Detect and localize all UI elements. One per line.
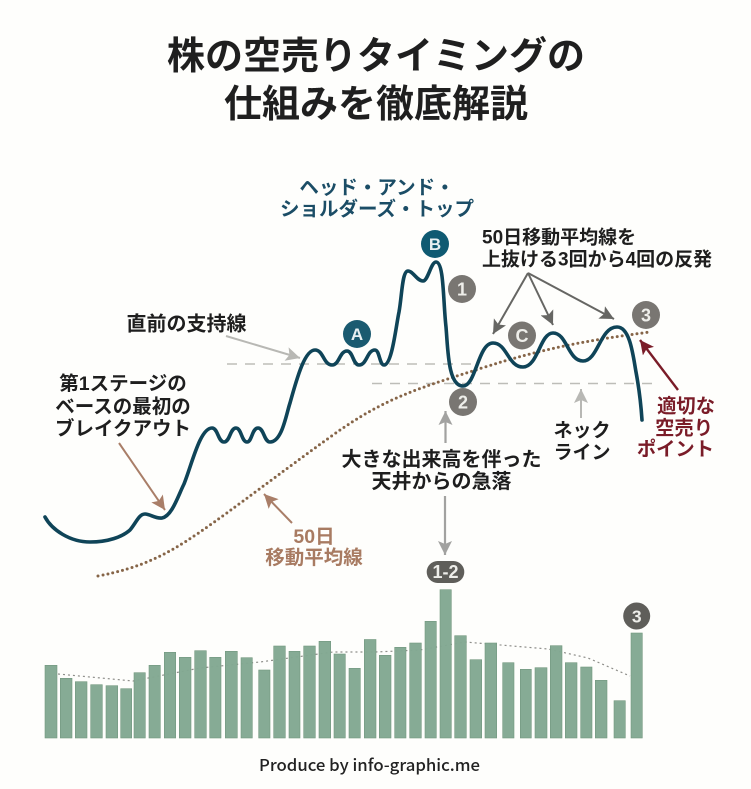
marker 1 (448, 275, 476, 303)
label: proper short selling point: 適切な (657, 396, 715, 418)
marker C (508, 322, 536, 350)
label: 50-day moving average (265, 526, 363, 569)
volume bar chart (45, 590, 642, 738)
label: first breakout: ブレイクアウト (55, 417, 191, 440)
label: sharp drop on heavy volume: 天井からの急落 (372, 470, 512, 493)
label: proper short selling point: 空売り (655, 418, 713, 440)
label: rebounds above moving average: 50日移動平均線を (482, 226, 636, 248)
label: rebounds above moving average: 上抜ける3回から4回の反発 (482, 248, 712, 270)
label: first breakout: ベースの最初の (55, 396, 191, 418)
marker 3 upper: 3 (641, 306, 651, 326)
title (167, 36, 585, 126)
marker 1: 1 (457, 280, 467, 300)
arrow: short selling point (640, 340, 678, 390)
arrow: first breakout (119, 443, 165, 510)
footer credit: Produce by info-graphic.me (259, 752, 480, 776)
neckline (dashed) (372, 382, 655, 384)
marker 2: 2 (458, 392, 468, 412)
label: neckline: ライン (553, 442, 611, 464)
label: proper short selling point: ポイント (637, 438, 714, 460)
label: prior support line: 直前の支持線 (126, 308, 246, 336)
arrow: 50-day moving average (264, 494, 292, 523)
marker A: A (351, 325, 363, 344)
title: 株の空売りタイミングの (167, 36, 585, 78)
marker C: C (516, 326, 528, 346)
label: first breakout: 第1ステージの (59, 373, 187, 395)
heading: head and shoulders top (280, 177, 475, 220)
volume marker 3: 3 (632, 606, 642, 626)
title: 仕組みを徹底解説 (224, 84, 528, 126)
label: first breakout (55, 373, 191, 440)
price line (45, 262, 642, 542)
heading: head and shoulders top: ヘッド・アンド・ (299, 177, 455, 199)
label: proper short selling point (637, 396, 715, 460)
arrow: prior support line (226, 336, 300, 358)
50-day moving average dotted line (98, 332, 650, 576)
marker B: B (429, 235, 441, 254)
volume marker 1-2 (427, 561, 464, 583)
arrow: down to volume 1-2 (444, 496, 446, 555)
marker 2 (449, 388, 477, 416)
volume average dotted line (58, 642, 630, 681)
arrow: neckline (580, 389, 582, 418)
marker A (343, 320, 371, 348)
volume marker 1-2: 1-2 (432, 562, 459, 582)
heading: head and shoulders top: ショルダーズ・トップ (280, 198, 475, 220)
label: rebounds above moving average (482, 226, 712, 270)
label: 50-day moving average: 50日 (293, 526, 335, 548)
label: neckline: ネック (553, 420, 611, 442)
label: sharp drop on heavy volume: 大きな出来高を伴った (342, 448, 542, 471)
marker B (421, 230, 449, 258)
label: 50-day moving average: 移動平均線 (265, 547, 363, 569)
arrows: rebounds (493, 273, 614, 334)
marker 3 upper (632, 301, 660, 329)
support line (dashed) (227, 363, 472, 365)
label: neckline (553, 420, 611, 464)
arrow: up to point 2 (444, 411, 447, 443)
volume marker 3 (623, 602, 650, 630)
label: sharp drop on heavy volume (342, 448, 542, 493)
